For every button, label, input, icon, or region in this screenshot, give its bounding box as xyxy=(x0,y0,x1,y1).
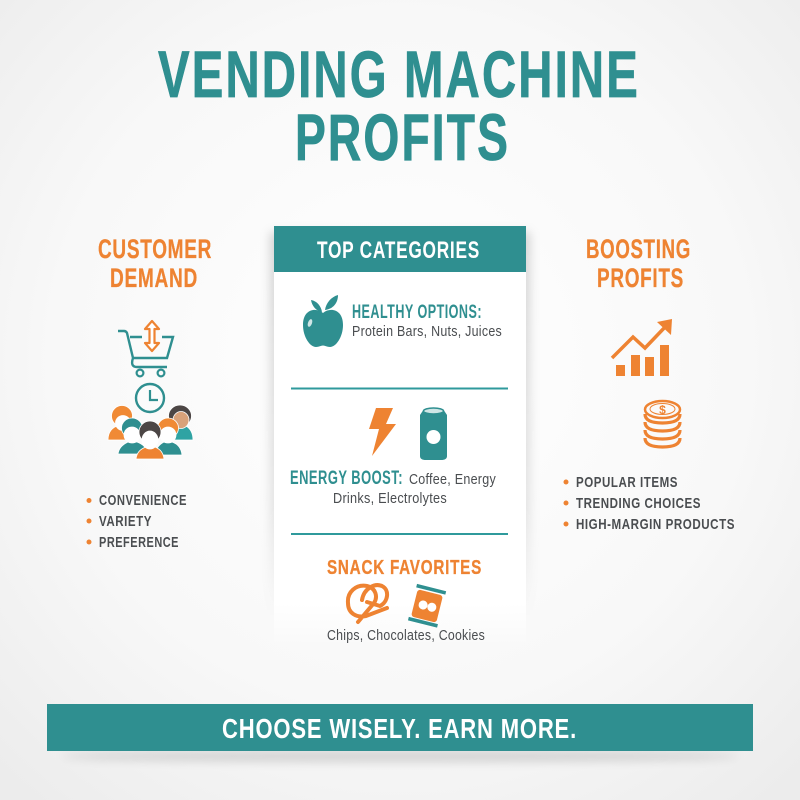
list: profit drivers: TRENDING CHOICES xyxy=(576,495,701,512)
icon: coin stack: $ xyxy=(659,403,666,417)
list: demand factors: VARIETY xyxy=(99,513,152,530)
text: energy boost: Coffee, Energy xyxy=(409,472,496,488)
heading: customer demand: CUSTOMER xyxy=(98,234,212,264)
text: healthy options: HEALTHY OPTIONS: xyxy=(352,302,482,323)
text: energy boost: ENERGY BOOST: xyxy=(290,468,403,489)
list: demand factors: PREFERENCE xyxy=(99,534,179,551)
title: PROFITS xyxy=(295,100,510,174)
heading: boosting profits: BOOSTING xyxy=(586,234,691,264)
text: healthy options: Protein Bars, Nuts, Juices xyxy=(352,324,502,340)
footer banner xyxy=(47,704,753,751)
icon: growth chart xyxy=(612,319,672,376)
icon: chips bag xyxy=(408,584,446,628)
text: energy boost: Drinks, Electrolytes xyxy=(333,491,447,507)
icon: apple xyxy=(303,295,343,347)
icon: lightning bolt xyxy=(369,408,396,456)
heading: snack favorites: SNACK FAVORITES xyxy=(327,557,482,579)
list: profit drivers: HIGH-MARGIN PRODUCTS xyxy=(576,516,735,533)
panel header: TOP CATEGORIES xyxy=(317,237,480,264)
icon: shopping cart with arrows xyxy=(118,321,173,376)
icon: clock xyxy=(136,384,164,412)
text: snack items: Chips, Chocolates, Cookies xyxy=(327,628,485,644)
icon: customers group xyxy=(108,405,193,459)
heading: boosting profits: PROFITS xyxy=(597,263,684,293)
list: demand factors: CONVENIENCE xyxy=(99,492,187,509)
icon: coin stack xyxy=(645,401,680,447)
panel: customer demand xyxy=(86,234,212,551)
panel header xyxy=(274,226,526,272)
heading: customer demand: DEMAND xyxy=(110,263,198,293)
heading: customer demand xyxy=(98,234,212,293)
panel: top categories xyxy=(270,226,530,646)
list: demand factors xyxy=(86,492,187,551)
heading: boosting profits xyxy=(586,234,691,293)
list: profit drivers: POPULAR ITEMS xyxy=(576,474,678,491)
title xyxy=(158,37,640,174)
list: profit drivers xyxy=(564,474,735,533)
text: healthy options xyxy=(352,302,502,340)
panel: boosting profits xyxy=(564,234,735,533)
text: energy boost xyxy=(290,468,496,507)
icon: energy drink can xyxy=(420,408,447,460)
icon: pretzel xyxy=(348,585,387,622)
footer banner: CHOOSE WISELY. EARN MORE. xyxy=(222,713,577,744)
